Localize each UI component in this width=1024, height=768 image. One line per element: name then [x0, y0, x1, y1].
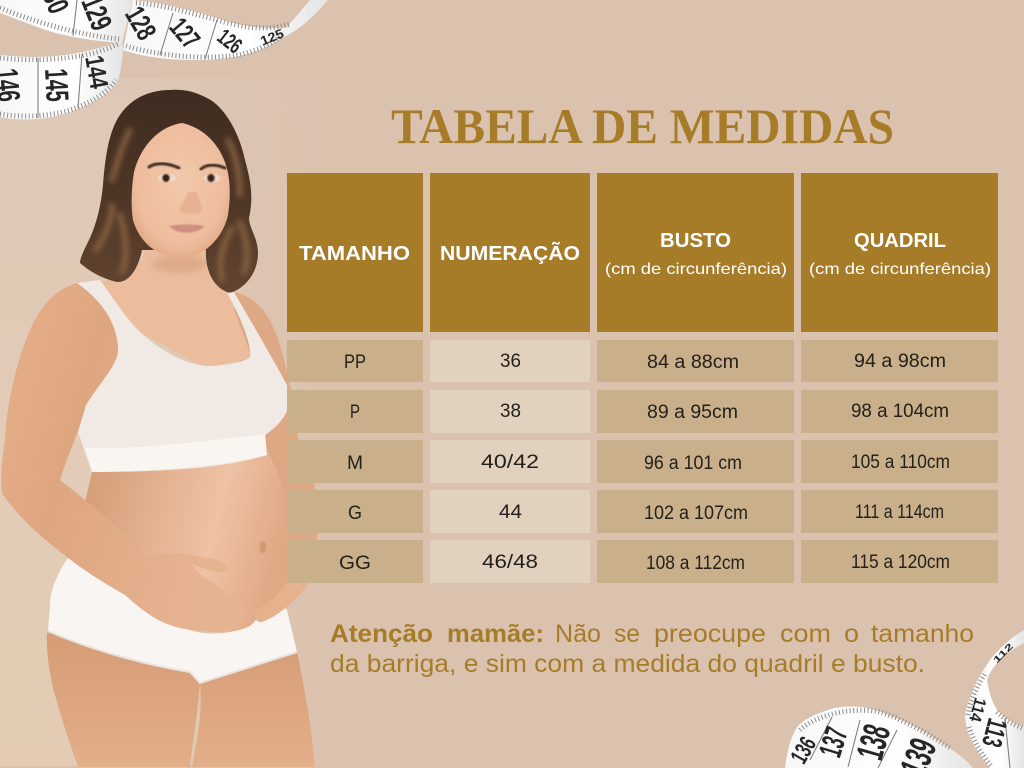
hair highlights: [96, 130, 247, 280]
row M: 96 a 101 cm: [644, 453, 742, 474]
row GG: GG: [339, 553, 371, 574]
row P: 98 a 104cm: [851, 401, 949, 422]
belly: [72, 452, 293, 635]
bra band: [85, 434, 267, 472]
row G: 102 a 107cm: [644, 503, 748, 524]
measuring tape: top left: 125: [258, 26, 286, 48]
row G: 44: [499, 502, 522, 523]
header: quadril: [801, 173, 998, 332]
tape band large: [785, 706, 973, 768]
size table: [287, 173, 998, 583]
measuring tape: bottom right: 114: [965, 696, 990, 724]
header: numeracao: NUMERAÇÃO: [440, 242, 580, 265]
tape tick marks: [0, 3, 290, 116]
measuring tape: top left: 128: [119, 1, 162, 45]
right arm behind body: [233, 292, 318, 622]
row G: 111 a 114cm: [855, 502, 944, 523]
measuring tape: bottom right: 137: [812, 723, 855, 761]
attention note: se: [614, 620, 640, 648]
row G: [287, 490, 998, 533]
measuring tape: top left: 127: [164, 12, 206, 54]
brief hem: [48, 631, 297, 683]
header: tamanho: [287, 173, 423, 332]
left eye: [158, 174, 176, 182]
row G: G: [348, 503, 362, 524]
tape band lower: [0, 40, 123, 119]
header: numeracao: [430, 173, 590, 332]
measuring tape: bottom right: 138: [849, 720, 899, 764]
row P: P: [350, 402, 360, 423]
measuring tape: bottom right: [785, 630, 1024, 768]
navel: [260, 541, 266, 553]
tape divider lines: [38, 0, 217, 118]
briefs: [48, 558, 297, 683]
row PP: [287, 340, 998, 382]
header: busto: BUSTO: [660, 230, 731, 252]
attention note: com: [780, 620, 831, 648]
measuring tape: top left: 144: [79, 53, 115, 91]
hair: [80, 90, 258, 293]
attention note: Não: [555, 620, 601, 648]
header: tamanho: TAMANHO: [299, 243, 410, 265]
fingers of right hand: [255, 579, 307, 622]
row M: M: [347, 453, 363, 474]
left arm and hand: [1, 283, 247, 632]
attention note: o: [844, 620, 859, 648]
measuring tape: top left: 126: [213, 24, 247, 58]
row PP: 94 a 98cm: [854, 351, 946, 372]
tape numbers: 136: [786, 732, 822, 768]
attention note: tamanho: [871, 620, 974, 648]
nose: [179, 192, 202, 214]
row PP: PP: [344, 352, 366, 373]
right eye: [204, 174, 220, 182]
row GG: 115 a 120cm: [851, 552, 950, 573]
left brow: [149, 164, 179, 168]
row M: 105 a 110cm: [851, 452, 950, 473]
attention note: mamãe:: [447, 620, 544, 648]
attention note: da barriga, e sim com a medida do quadril e busto.: [330, 650, 925, 678]
row P: [287, 390, 998, 433]
photo: pregnant woman: [1, 90, 318, 767]
measuring tape: bottom right: 112: [991, 641, 1015, 665]
tape divider lines: [810, 717, 1010, 768]
measuring tape: top left: 145: [38, 68, 76, 102]
header: quadril: (cm de circunferência): [809, 261, 991, 278]
row GG: 46/48: [482, 552, 538, 573]
attention note: [330, 620, 974, 678]
attention note: preocupe: [654, 620, 766, 648]
top: [77, 280, 288, 472]
row GG: [287, 540, 998, 583]
title: TABELA DE MEDIDAS: [391, 98, 894, 154]
tape tick marks: [800, 672, 1024, 767]
face: [132, 123, 230, 258]
tape band upper right: [123, 0, 328, 60]
neck shadow: [152, 255, 208, 273]
measuring tape: bottom right: 113: [976, 715, 1013, 750]
row PP: 36: [500, 351, 521, 372]
row P: 89 a 95cm: [647, 402, 738, 423]
row P: 38: [500, 401, 521, 422]
measuring tape: top left: [0, 0, 328, 119]
mouth: [169, 224, 205, 233]
header: quadril: QUADRIL: [854, 230, 946, 252]
row GG: 108 a 112cm: [646, 553, 745, 574]
right brow: [201, 165, 225, 169]
header: busto: [597, 173, 794, 332]
attention note: Atenção: [330, 620, 433, 648]
header: busto: (cm de circunferência): [605, 261, 787, 278]
row PP: 84 a 88cm: [647, 352, 739, 373]
legs: [47, 630, 315, 767]
row M: 40/42: [481, 452, 539, 473]
tape band upper left: [0, 0, 133, 43]
photo backdrop: [0, 78, 325, 766]
neck and chest: [98, 235, 252, 368]
tape band loop: [965, 630, 1024, 768]
row M: [287, 440, 998, 483]
